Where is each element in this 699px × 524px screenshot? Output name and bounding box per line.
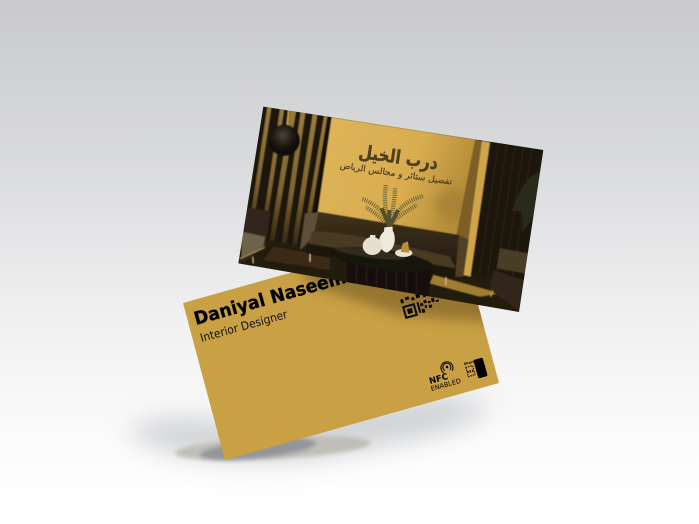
floor shadow — [125, 395, 492, 464]
left armchair — [240, 207, 271, 263]
plant silhouette — [512, 172, 540, 232]
icon: phone with share label — [463, 357, 488, 381]
card surface — [183, 226, 499, 460]
photo content — [238, 106, 544, 312]
sofa — [300, 212, 469, 285]
coffee table — [335, 246, 433, 296]
icon: NFC waves — [440, 360, 454, 374]
logo title: درب الخيل — [357, 142, 439, 174]
lamp cord — [287, 107, 289, 125]
plant — [362, 184, 423, 227]
logo tagline: تفصيل ستائر و مجالس الرياض — [339, 161, 453, 188]
card base — [238, 106, 544, 310]
dark slatted panel — [470, 142, 540, 276]
NFC label: ENABLED — [430, 377, 462, 393]
icon: phone with share label: Share — [463, 359, 476, 366]
front of card: interior photo — [238, 106, 544, 312]
vases and bowl — [363, 227, 412, 257]
QR code — [400, 285, 454, 319]
NFC label: NFC — [428, 372, 449, 387]
job title: Interior Designer — [199, 307, 289, 345]
yellow wall — [317, 117, 478, 240]
right armchair — [490, 248, 528, 310]
pendant lamp — [269, 125, 300, 156]
floor — [252, 240, 487, 297]
left wooden slats — [252, 107, 330, 246]
shadow on wall — [434, 188, 463, 220]
wall pilaster — [456, 140, 482, 240]
name: Daniyal Naseem — [192, 267, 348, 330]
back of card: gold — [183, 272, 499, 460]
